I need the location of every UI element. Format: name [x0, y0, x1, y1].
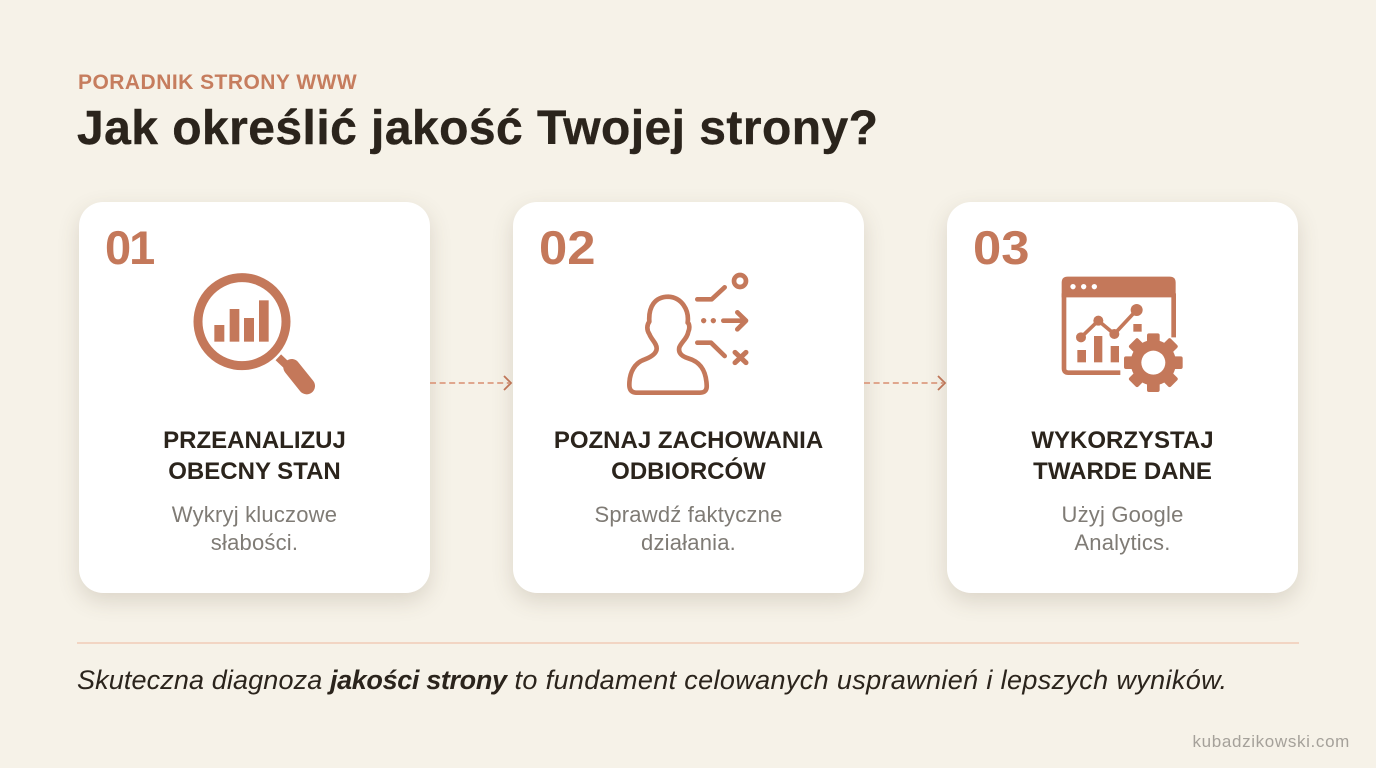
step 1 heading — [163, 427, 346, 485]
step 2 heading — [554, 427, 823, 485]
step 1 description — [172, 502, 337, 555]
step 1 heading: PRZEANALIZUJ — [163, 427, 346, 454]
step 1 heading: OBECNY STAN — [168, 458, 341, 485]
panel: step 3 — [947, 202, 1298, 593]
step number 02: 02 — [539, 221, 595, 274]
step number 03: 03 — [973, 221, 1029, 274]
step 2 heading: POZNAJ ZACHOWANIA — [554, 427, 823, 454]
step number 01: 01 — [105, 221, 153, 274]
step 2 description: działania. — [641, 530, 736, 555]
step 1 description: Wykryj kluczowe — [172, 502, 337, 527]
step 3 heading: TWARDE DANE — [1033, 458, 1212, 485]
step 3 heading — [1031, 427, 1214, 485]
title: Jak określić jakość Twojej strony? — [77, 102, 878, 155]
icon: person with behaviour paths — [627, 272, 748, 395]
step 2 description: Sprawdź faktyczne — [594, 502, 783, 527]
icon: browser window with chart and gear — [1062, 276, 1183, 392]
arrow: step 1 to step 2 — [430, 375, 512, 391]
arrow: step 2 to step 3 — [864, 375, 946, 391]
icon: magnifying glass with bar chart — [194, 273, 315, 394]
step 1 description: słabości. — [211, 530, 298, 555]
step 3 description: Użyj Google — [1061, 502, 1184, 527]
panel: step 1 — [79, 202, 430, 593]
credit: kubadzikowski.com — [1192, 732, 1350, 751]
step 2 description — [594, 502, 783, 555]
eyebrow label: PORADNIK STRONY WWW — [78, 71, 357, 94]
panel: step 2 — [513, 202, 864, 593]
step 3 description: Analytics. — [1074, 530, 1171, 555]
step 3 description — [1061, 502, 1184, 555]
step 2 heading: ODBIORCÓW — [611, 458, 766, 485]
step 3 heading: WYKORZYSTAJ — [1031, 427, 1214, 454]
summary sentence: Skuteczna diagnoza jakości strony to fundament celowanych usprawnień i lepszych wyników. — [77, 665, 1227, 695]
